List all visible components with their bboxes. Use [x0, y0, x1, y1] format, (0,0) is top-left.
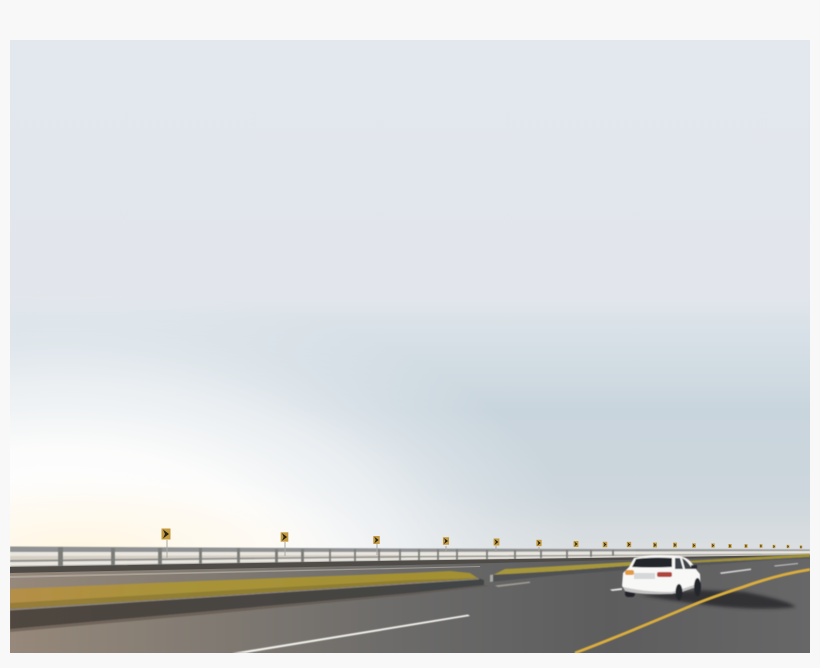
licence plate: [634, 573, 655, 579]
chevron road signs: [162, 528, 802, 558]
white car: [622, 555, 701, 600]
car body: [622, 555, 700, 593]
rear wheel left: [624, 592, 636, 598]
side windows: [675, 558, 683, 569]
tail lights: [625, 570, 634, 575]
median strip: near grass and curb: [10, 571, 490, 632]
road surface: [10, 555, 810, 653]
median strip: second island: [490, 554, 810, 582]
wheels right: [676, 584, 682, 600]
lane markings: [232, 563, 798, 653]
guardrail and view through it: [10, 546, 810, 570]
rear window: [632, 558, 672, 568]
sky: [10, 40, 810, 560]
car shadow: [640, 590, 796, 609]
yellow edge line: [575, 570, 810, 653]
